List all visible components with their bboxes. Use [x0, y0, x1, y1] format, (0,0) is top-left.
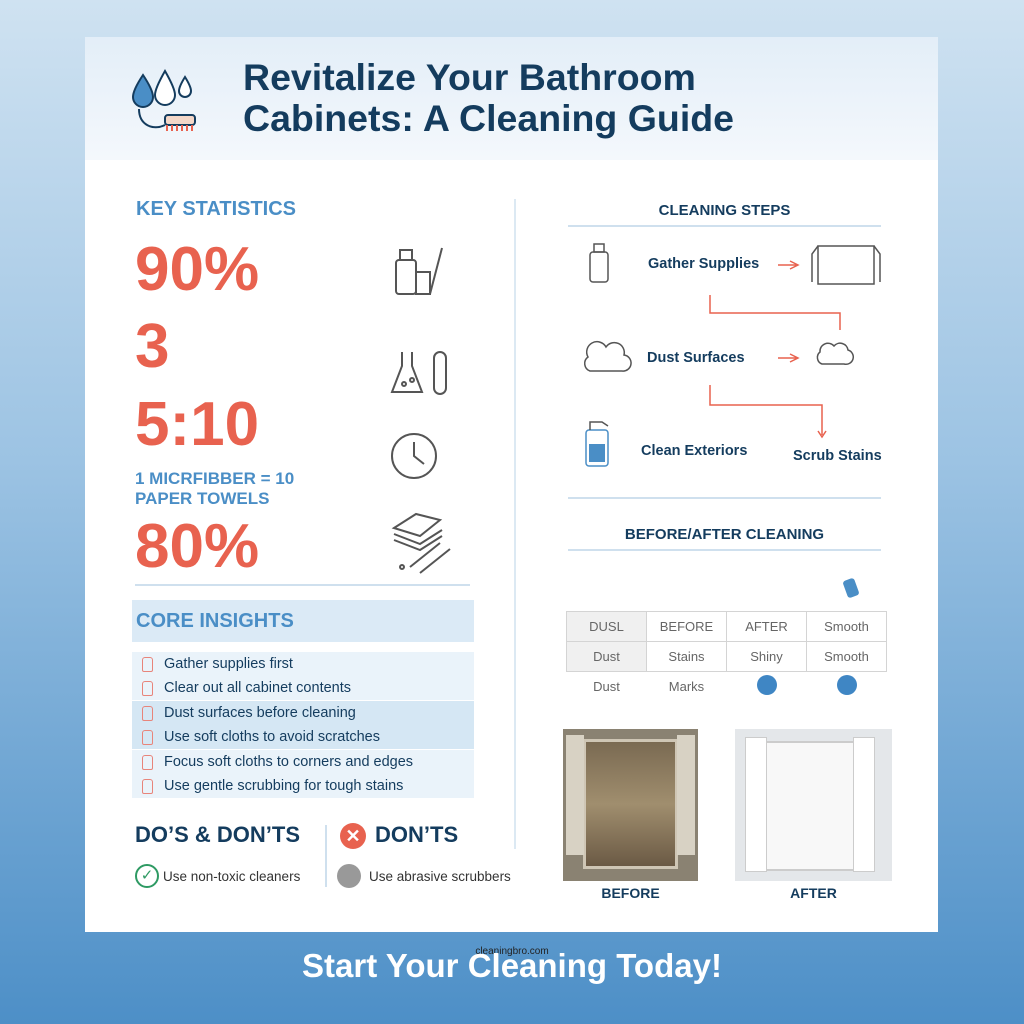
main card: Dust surfaces before cleaning — [164, 705, 356, 721]
do item — [135, 864, 300, 888]
comparison table: DUSL — [589, 619, 624, 634]
divider — [135, 584, 470, 586]
panel: cleaning steps — [568, 202, 881, 467]
stat 80%: 80% — [135, 512, 259, 581]
icon: water drops and brush — [132, 69, 196, 131]
do item: Use non-toxic cleaners — [163, 868, 300, 884]
stat microfiber: PAPER TOWELS — [135, 489, 269, 508]
stat 3: 3 — [135, 312, 169, 381]
panel: do's and don'ts — [135, 822, 511, 888]
panel: key statistics — [135, 198, 470, 586]
photo: before — [563, 729, 698, 881]
stat microfiber — [135, 469, 294, 508]
comparison table: BEFORE — [660, 619, 713, 634]
heading: core insights — [132, 600, 474, 642]
main card: Use soft cloths to avoid scratches — [164, 729, 380, 745]
heading: key statistics: KEY STATISTICS — [136, 198, 296, 220]
comparison table: Dust — [593, 649, 620, 664]
heading: before/after: BEFORE/AFTER CLEANING — [625, 526, 824, 543]
comparison table: Dust — [593, 679, 620, 694]
comparison table: AFTER — [745, 619, 788, 634]
list: insights: Clear out all cabinet contents — [164, 680, 351, 696]
step: scrub stains: Scrub Stains — [793, 448, 882, 464]
comparison table: Smooth — [824, 619, 869, 634]
dont item — [337, 864, 511, 888]
footer call to action: Start Your Cleaning Today! — [302, 947, 722, 984]
dont item: Use abrasive scrubbers — [369, 868, 511, 884]
comparison table: Marks — [669, 679, 704, 694]
vertical dividers — [514, 199, 516, 849]
icon: x: ✕ — [345, 826, 361, 846]
stat 90%: 90% — [135, 235, 259, 304]
heading: dos: DO’S & DON’TS — [135, 822, 300, 847]
main card — [85, 37, 938, 932]
comparison table — [566, 611, 887, 695]
comparison table: Stains — [668, 649, 705, 664]
list: insights: Gather supplies first — [164, 656, 293, 672]
flow diagram — [584, 243, 881, 467]
title: Revitalize Your Bathroom — [243, 56, 696, 98]
photo: after — [735, 729, 892, 881]
step: dust surfaces: Dust Surfaces — [647, 350, 745, 366]
stat 5:10: 5:10 — [135, 390, 259, 459]
title — [243, 56, 734, 139]
header band — [85, 37, 938, 160]
label: after: AFTER — [790, 885, 837, 901]
heading: donts: DON’TS — [375, 822, 458, 847]
footer url: cleaningbro.com — [475, 946, 549, 957]
comparison table: Shiny — [750, 649, 783, 664]
comparison table: Smooth — [824, 649, 869, 664]
step: clean exteriors: Clean Exteriors — [641, 443, 747, 459]
title: Cabinets: A Cleaning Guide — [243, 97, 734, 139]
heading: core insights: CORE INSIGHTS — [136, 610, 294, 632]
icons: stats — [390, 248, 450, 574]
list: insights — [132, 652, 474, 700]
stat microfiber: 1 MICRFIBBER = 10 — [135, 469, 294, 488]
step: gather supplies: Gather Supplies — [648, 256, 759, 272]
icon: x — [340, 823, 366, 849]
main card: Use gentle scrubbing for tough stains — [164, 778, 403, 794]
main card: Focus soft cloths to corners and edges — [164, 754, 413, 770]
do item: ✓ — [141, 867, 153, 884]
icon: spray — [842, 577, 860, 599]
heading: cleaning steps: CLEANING STEPS — [659, 202, 790, 219]
label: before: BEFORE — [601, 885, 660, 901]
